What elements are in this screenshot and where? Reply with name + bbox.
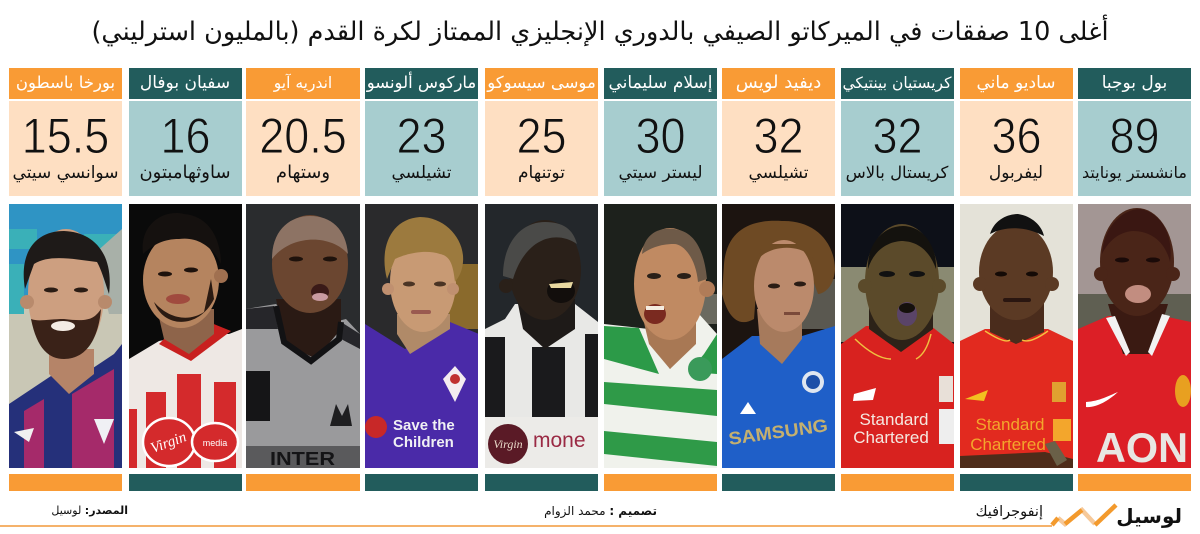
value panel: ليفربول bbox=[989, 163, 1043, 183]
value panel bbox=[960, 101, 1072, 196]
color bar bbox=[128, 474, 242, 490]
player photo bbox=[129, 204, 242, 468]
logo wordmark: لوسيل bbox=[1116, 504, 1182, 528]
player photo: Standard bbox=[859, 410, 928, 428]
value panel: 15.5 bbox=[22, 108, 109, 164]
value panel: 16 bbox=[160, 108, 210, 164]
value panel bbox=[840, 101, 954, 196]
logo: Lusail zigzag bbox=[1050, 503, 1118, 527]
player photo bbox=[722, 204, 835, 468]
footer rule bbox=[0, 524, 1052, 526]
player photo bbox=[1078, 204, 1191, 468]
column: Slimani bbox=[604, 68, 717, 491]
title: أغلى 10 صفقات في الميركاتو الصيفي بالدوري الإنجليزي الممتاز لكرة القدم (بالمليون استرليني) bbox=[91, 17, 1109, 47]
player name bbox=[722, 68, 835, 99]
value panel: ساوثهامبتون bbox=[139, 162, 231, 183]
player name bbox=[9, 68, 122, 99]
column: Bastón bbox=[9, 68, 122, 491]
value panel: 25 bbox=[516, 108, 567, 164]
value panel: 32 bbox=[872, 108, 922, 164]
player photo: Standard bbox=[975, 414, 1044, 434]
player name bbox=[1078, 68, 1191, 99]
player photo bbox=[9, 204, 122, 468]
value panel: توتنهام bbox=[518, 163, 565, 183]
player photo bbox=[365, 204, 478, 468]
source credit: المصدر: لوسيل bbox=[51, 504, 128, 517]
player name: كريستيان بينتيكي bbox=[843, 74, 951, 92]
value panel: وستهام bbox=[276, 162, 330, 183]
value panel: 23 bbox=[396, 108, 447, 164]
color bar bbox=[246, 474, 360, 490]
column: Boufal bbox=[129, 68, 242, 491]
value panel bbox=[485, 101, 598, 196]
value panel: مانشستر يونايتد bbox=[1082, 163, 1187, 182]
player name: موسى سيسوكو bbox=[487, 73, 596, 92]
column: Benteke bbox=[841, 68, 954, 491]
value panel bbox=[128, 101, 242, 196]
infographic label: إنفوجرافيك bbox=[976, 504, 1043, 520]
player photo bbox=[604, 204, 717, 468]
color bar bbox=[960, 474, 1072, 490]
player name: بول بوجبا bbox=[1102, 73, 1167, 93]
player name: ساديو ماني bbox=[976, 73, 1056, 93]
value panel: 89 bbox=[1109, 108, 1160, 164]
value panel bbox=[246, 101, 360, 196]
value panel bbox=[604, 101, 717, 196]
player photo: INTER bbox=[270, 448, 335, 468]
player name: ماركوس ألونسو bbox=[367, 73, 476, 92]
value panel: 32 bbox=[753, 108, 804, 164]
value panel: تشيلسي bbox=[392, 163, 452, 183]
color bar bbox=[722, 474, 835, 490]
player photo: Chartered bbox=[970, 434, 1045, 454]
player name bbox=[840, 68, 954, 99]
column: Alonso bbox=[365, 68, 478, 491]
value panel: كريستال بالاس bbox=[846, 163, 948, 182]
column: Ayew bbox=[246, 68, 360, 491]
value panel: ليستر سيتي bbox=[618, 163, 703, 183]
player name: سفيان بوفال bbox=[140, 73, 230, 93]
color bar bbox=[365, 474, 478, 490]
player photo: mone bbox=[533, 428, 586, 452]
player name: إسلام سليماني bbox=[609, 73, 712, 93]
value panel bbox=[365, 101, 478, 196]
player photo: Virgin bbox=[148, 429, 188, 456]
player photo: Children bbox=[393, 434, 454, 450]
player photo bbox=[485, 204, 598, 468]
player photo bbox=[960, 204, 1073, 468]
column: Sissoko bbox=[485, 68, 598, 491]
value panel: 36 bbox=[991, 108, 1041, 164]
player photo: Chartered bbox=[853, 428, 928, 446]
value panel bbox=[9, 101, 122, 196]
color bar bbox=[1078, 474, 1191, 490]
value panel bbox=[722, 101, 835, 196]
player name bbox=[128, 68, 242, 99]
value panel: 20.5 bbox=[259, 108, 347, 164]
player name: بورخا باسطون bbox=[16, 73, 115, 92]
value panel: سوانسي سيتي bbox=[13, 163, 118, 183]
column: David Luiz bbox=[722, 68, 835, 491]
player photo: media bbox=[202, 438, 227, 448]
player photo: Save the bbox=[393, 416, 455, 434]
player name bbox=[604, 68, 717, 99]
column: Pogba bbox=[1078, 68, 1191, 491]
player name bbox=[960, 68, 1072, 99]
color bar bbox=[485, 474, 598, 490]
value panel bbox=[1078, 101, 1191, 196]
value panel: 30 bbox=[635, 108, 686, 164]
color bar bbox=[840, 474, 954, 490]
player photo bbox=[246, 204, 360, 468]
column: Mane bbox=[960, 68, 1073, 491]
value panel: تشيلسي bbox=[748, 163, 808, 183]
player name bbox=[485, 68, 598, 99]
player photo bbox=[841, 204, 954, 468]
player name bbox=[246, 68, 360, 99]
color bar bbox=[9, 474, 122, 490]
designer credit: تصميم : محمد الزوام bbox=[544, 504, 657, 518]
player photo: SAMSUNG bbox=[727, 415, 829, 448]
player name bbox=[365, 68, 478, 99]
color bar bbox=[604, 474, 717, 490]
player name: اندريه آيو bbox=[274, 74, 332, 92]
player photo: Virgin bbox=[493, 436, 523, 450]
player name: ديفيد لويس bbox=[736, 72, 821, 93]
